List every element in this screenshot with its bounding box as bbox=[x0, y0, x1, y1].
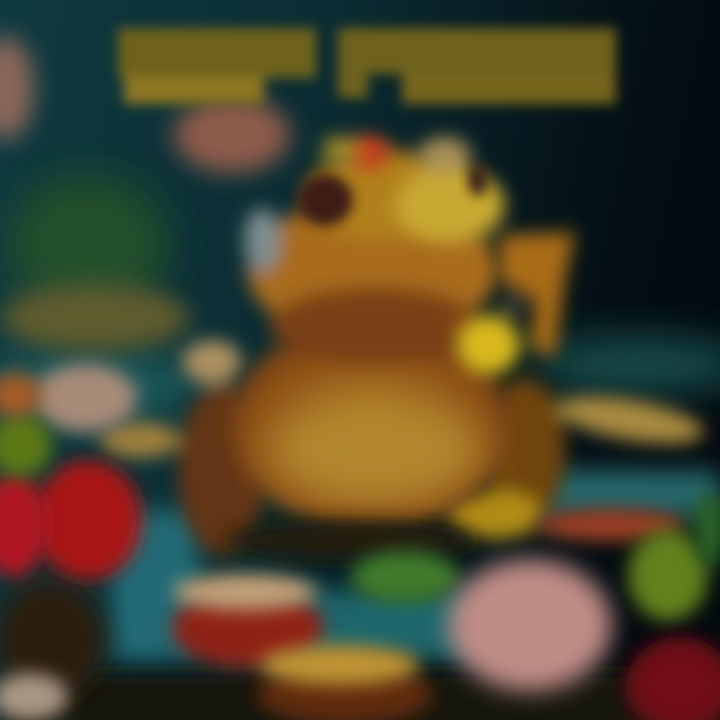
strawberries at left bbox=[0, 364, 142, 720]
pink and red fruit at right bbox=[448, 492, 720, 720]
frog: eye bbox=[297, 174, 353, 226]
frog: head bbox=[244, 150, 497, 363]
background bokeh: pink blossoms and green mound bbox=[0, 36, 290, 352]
frog: right leg and toes bbox=[447, 378, 707, 539]
frog: torso bbox=[230, 320, 510, 530]
green leaf bbox=[351, 551, 459, 603]
frog: head highlights bbox=[322, 135, 575, 375]
title: blurred yellow lettering bbox=[118, 28, 616, 104]
apple slices in foreground bbox=[172, 574, 433, 720]
frog bbox=[100, 135, 707, 560]
frog: left leg bbox=[100, 340, 266, 555]
